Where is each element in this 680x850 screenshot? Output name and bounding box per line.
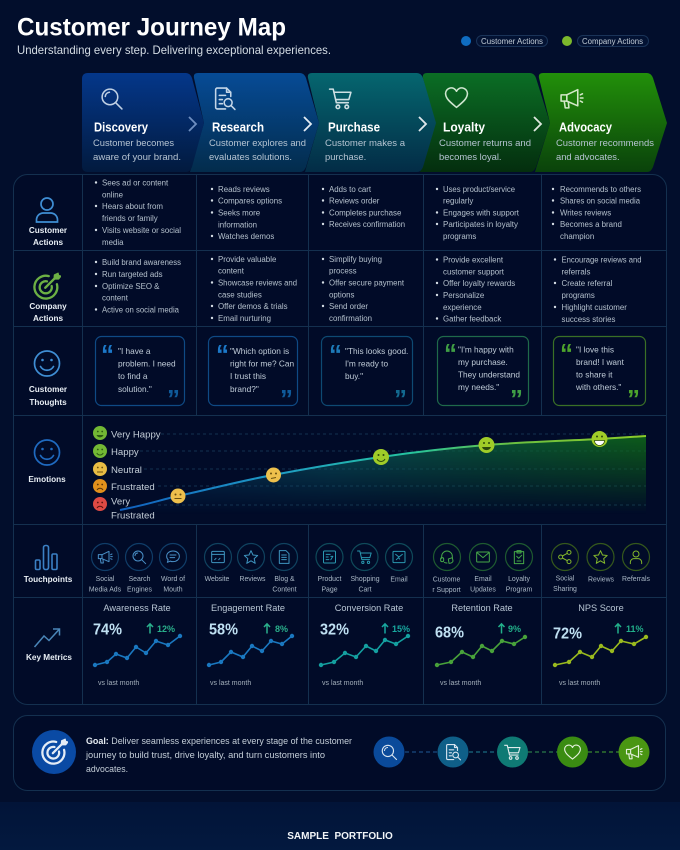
customer actions: loyalty: regularly bbox=[443, 196, 473, 206]
main table bbox=[14, 174, 666, 704]
row: touchpoints bbox=[24, 544, 651, 594]
company actions: advocacy: programs bbox=[562, 291, 595, 300]
marker: loyalty very happy bbox=[478, 437, 494, 453]
row label: customer thoughts bbox=[29, 351, 68, 407]
touchpoints: discovery: Social bbox=[96, 576, 115, 583]
row label: key metrics: Key Metrics bbox=[26, 653, 72, 662]
emotion scale labels bbox=[93, 426, 161, 522]
stage: advocacy: Customer recommends bbox=[556, 137, 654, 148]
journey stages bbox=[82, 73, 667, 172]
quote: advocacy: ” bbox=[627, 384, 640, 414]
touchpoints: discovery: Media Ads bbox=[89, 586, 122, 594]
company actions: loyalty bbox=[436, 256, 515, 324]
emotion scale labels: Frustrated bbox=[111, 510, 155, 522]
quote: research: right for me? Can bbox=[230, 358, 294, 368]
customer actions: purchase: Reviews order bbox=[329, 196, 380, 206]
customer actions: discovery: online bbox=[102, 190, 124, 200]
quote: loyalty: “ bbox=[444, 338, 457, 368]
company actions: research: Provide valuable bbox=[218, 255, 277, 264]
quote: research bbox=[208, 336, 298, 414]
customer actions: discovery: friends or family bbox=[102, 214, 158, 223]
customer actions: advocacy: Recommends to others bbox=[560, 185, 641, 194]
touchpoints: research bbox=[204, 544, 298, 594]
footer label: SAMPLE PORTFOLIO bbox=[287, 831, 393, 842]
stage: loyalty: becomes loyal. bbox=[439, 151, 502, 162]
touchpoints: research: Blog & bbox=[274, 576, 295, 583]
marker: research unsure bbox=[266, 468, 281, 482]
touchpoints: loyalty bbox=[432, 544, 532, 594]
customer actions: purchase: Adds to cart bbox=[329, 185, 372, 194]
quote: advocacy bbox=[554, 336, 646, 414]
quote: advocacy: “ bbox=[560, 338, 573, 368]
quote: loyalty: "I'm happy with bbox=[458, 344, 514, 354]
face: happy bbox=[93, 444, 107, 458]
step: discovery bbox=[374, 736, 404, 768]
legend: customer actions: Customer Actions bbox=[481, 37, 543, 46]
touchpoints: purchase: Product bbox=[318, 576, 341, 583]
emotion scale labels: Very bbox=[111, 496, 130, 508]
quote: purchase bbox=[322, 336, 412, 414]
legend bbox=[461, 36, 648, 46]
arrow bbox=[189, 117, 196, 131]
company actions: advocacy: referrals bbox=[562, 268, 590, 276]
customer actions: advocacy: Shares on social media bbox=[560, 196, 641, 206]
face: very happy bbox=[93, 426, 107, 440]
customer actions: research: Watches demos bbox=[218, 232, 274, 241]
customer actions: advocacy: champion bbox=[560, 232, 594, 241]
emotion scale labels: Very Happy bbox=[111, 430, 161, 440]
row: customer actions bbox=[29, 178, 641, 247]
customer actions: purchase: Receives confirmation bbox=[329, 220, 405, 229]
touchpoints: advocacy: Reviews bbox=[588, 576, 615, 584]
touchpoints: research: Reviews bbox=[239, 576, 266, 583]
row label: customer thoughts: Customer bbox=[29, 385, 68, 394]
company actions: purchase: Send order bbox=[329, 302, 368, 311]
stage: advocacy: and advocates. bbox=[556, 151, 620, 162]
customer actions: research: Compares options bbox=[218, 196, 282, 206]
quote: research: "Which option is bbox=[230, 346, 289, 356]
company actions: loyalty: Gather feedback bbox=[443, 314, 501, 324]
customer actions: research: information bbox=[218, 220, 257, 230]
quote: loyalty: ” bbox=[510, 384, 523, 414]
journey progress bbox=[374, 736, 650, 768]
row label: company actions: Actions bbox=[33, 314, 63, 323]
company actions: loyalty: Provide excellent bbox=[443, 256, 504, 264]
quote: research: brand?" bbox=[230, 384, 259, 394]
quote: advocacy: brand! I want bbox=[576, 357, 625, 367]
company actions: loyalty: experience bbox=[443, 303, 482, 312]
touchpoints: advocacy bbox=[552, 544, 651, 593]
row label: emotions bbox=[28, 440, 66, 484]
quote: purchase: buy." bbox=[345, 371, 363, 381]
emotion scale labels: Neutral bbox=[111, 465, 142, 476]
step: research bbox=[438, 736, 468, 768]
company actions: loyalty: Personalize bbox=[443, 291, 485, 300]
touchpoints: loyalty: r Support bbox=[432, 587, 461, 594]
stage: discovery: Customer becomes bbox=[93, 137, 174, 148]
step: loyalty bbox=[557, 736, 588, 768]
stage: purchase bbox=[305, 73, 436, 172]
touchpoints: loyalty: Loyalty bbox=[508, 576, 530, 583]
goal panel bbox=[14, 716, 666, 790]
metric: engagement rate: Engagement Rate bbox=[211, 603, 285, 613]
title: Customer Journey Map bbox=[17, 14, 286, 42]
company actions: purchase: options bbox=[329, 290, 354, 300]
company actions: research: Email nurturing bbox=[218, 314, 271, 323]
row label: company actions bbox=[29, 273, 67, 323]
goal text: Goal: Deliver seamless experiences at every stage of the customer bbox=[86, 736, 352, 746]
touchpoints: purchase bbox=[316, 544, 412, 594]
metric: awareness rate bbox=[93, 603, 182, 687]
customer actions: loyalty: programs bbox=[443, 232, 476, 241]
metric: awareness rate: Awareness Rate bbox=[103, 603, 171, 613]
touchpoints: advocacy: Social bbox=[556, 576, 575, 582]
stage: loyalty: Customer returns and bbox=[439, 137, 531, 148]
company actions: research: case studies bbox=[218, 290, 262, 300]
arrow bbox=[534, 117, 541, 131]
row label: touchpoints bbox=[24, 546, 73, 584]
touchpoints: discovery bbox=[89, 544, 186, 594]
metric: conversion rate: vs last month bbox=[322, 680, 363, 687]
emotion curve bbox=[120, 436, 646, 510]
company actions: research: Offer demos & trials bbox=[218, 302, 288, 311]
customer actions: advocacy: Writes reviews bbox=[560, 208, 611, 218]
customer actions: advocacy bbox=[552, 185, 641, 241]
stage: loyalty: Loyalty bbox=[443, 120, 485, 134]
metric: nps score: vs last month bbox=[559, 680, 600, 687]
row: customer thoughts bbox=[29, 336, 646, 414]
customer actions: research bbox=[211, 185, 282, 241]
company actions: advocacy: Create referral bbox=[562, 279, 613, 288]
row: company actions bbox=[29, 255, 642, 324]
face: very frustrated bbox=[93, 497, 107, 511]
customer actions: loyalty: Engages with support bbox=[443, 208, 520, 218]
customer actions: discovery: media bbox=[102, 238, 124, 247]
quote: loyalty: They understand bbox=[458, 370, 520, 380]
row label: key metrics bbox=[26, 629, 72, 662]
company actions: research: Showcase reviews and bbox=[218, 278, 297, 288]
quote: discovery: "I have a bbox=[118, 346, 151, 356]
metric: nps score: 72% bbox=[553, 626, 582, 642]
touchpoints: loyalty: Program bbox=[506, 586, 532, 594]
company actions: loyalty: Offer loyalty rewards bbox=[443, 279, 515, 288]
customer actions: discovery bbox=[95, 178, 181, 247]
company actions: advocacy: success stories bbox=[562, 315, 615, 324]
quote: purchase: I'm ready to bbox=[345, 358, 388, 368]
emotion area bbox=[164, 437, 646, 506]
marker: advocacy delighted bbox=[592, 431, 608, 447]
customer actions: loyalty bbox=[436, 185, 520, 241]
touchpoints: research: Content bbox=[272, 586, 297, 594]
metric: retention rate: Retention Rate bbox=[451, 603, 513, 613]
arrow bbox=[304, 117, 311, 131]
emotion chart bbox=[93, 426, 646, 522]
company actions: purchase: Simplify buying bbox=[329, 255, 382, 264]
touchpoints: loyalty: Email bbox=[474, 576, 492, 583]
face: frustrated bbox=[93, 479, 107, 493]
metric: conversion rate: 15% bbox=[392, 624, 410, 634]
company actions: discovery: Run targeted ads bbox=[102, 270, 163, 279]
stage: research bbox=[190, 73, 319, 172]
company actions: purchase: Offer secure payment bbox=[329, 278, 405, 288]
customer actions: advocacy: Becomes a brand bbox=[560, 220, 622, 229]
company actions: purchase: confirmation bbox=[329, 314, 372, 323]
metric: awareness rate: 74% bbox=[93, 622, 122, 638]
stage: loyalty bbox=[420, 73, 550, 172]
row label: customer actions: Customer bbox=[29, 226, 68, 235]
quote: discovery: to find a bbox=[118, 371, 148, 381]
company actions: loyalty: customer support bbox=[443, 268, 505, 276]
touchpoints: advocacy: Referrals bbox=[622, 576, 651, 583]
stage: research: evaluates solutions. bbox=[209, 151, 292, 162]
legend: company actions: Company Actions bbox=[582, 37, 643, 46]
row label: touchpoints: Touchpoints bbox=[24, 575, 73, 584]
quote: advocacy: to share it bbox=[576, 370, 613, 380]
quote: discovery: ” bbox=[167, 384, 180, 414]
metric: awareness rate: vs last month bbox=[98, 680, 139, 687]
quote: purchase: ” bbox=[394, 384, 407, 414]
quote: loyalty: my purchase. bbox=[458, 357, 508, 367]
row: emotions bbox=[28, 426, 646, 522]
quote: discovery: problem. I need bbox=[118, 358, 176, 368]
stage: discovery: Discovery bbox=[94, 120, 148, 134]
stage: advocacy bbox=[535, 73, 667, 172]
metric: retention rate: 68% bbox=[435, 624, 464, 642]
metric: conversion rate: Conversion Rate bbox=[335, 603, 403, 613]
row: key metrics bbox=[26, 603, 648, 687]
touchpoints: loyalty: Updates bbox=[470, 586, 496, 594]
quote: advocacy: with others." bbox=[575, 382, 621, 392]
metric: engagement rate: 8% bbox=[275, 624, 288, 634]
row label: customer actions: Actions bbox=[33, 238, 63, 247]
goal text line 3: advocates. bbox=[86, 764, 128, 774]
quote: purchase: “ bbox=[329, 339, 342, 369]
touchpoints: purchase: Cart bbox=[358, 586, 372, 594]
stage: discovery: aware of your brand. bbox=[93, 151, 181, 162]
touchpoints: loyalty: Custome bbox=[433, 576, 460, 584]
metric: engagement rate bbox=[207, 603, 294, 687]
company actions: discovery: content bbox=[102, 294, 129, 302]
quote: discovery bbox=[96, 336, 184, 414]
legend: company actions bbox=[562, 36, 648, 46]
touchpoints: discovery: Search bbox=[129, 576, 151, 583]
metric: retention rate: vs last month bbox=[440, 680, 481, 687]
company actions: discovery: Optimize SEO & bbox=[102, 282, 160, 291]
face: neutral bbox=[93, 462, 107, 476]
customer actions: discovery: Hears about from bbox=[102, 202, 163, 211]
customer actions: research: Reads reviews bbox=[218, 185, 270, 194]
company actions: discovery: Active on social media bbox=[102, 306, 180, 314]
quote: discovery: solution." bbox=[118, 384, 152, 394]
stage: research: Customer explores and bbox=[209, 137, 306, 148]
stage: purchase: Purchase bbox=[328, 120, 380, 134]
customer actions: discovery: Sees ad or content bbox=[102, 178, 169, 188]
footer band bbox=[0, 802, 680, 850]
touchpoints: purchase: Page bbox=[321, 586, 338, 594]
stage: research: Research bbox=[212, 120, 264, 134]
company actions: advocacy: Encourage reviews and bbox=[562, 256, 642, 264]
goal icon bbox=[32, 730, 76, 774]
metric: conversion rate bbox=[319, 603, 410, 687]
stage: advocacy: Advocacy bbox=[559, 120, 612, 134]
company actions: discovery bbox=[95, 258, 181, 314]
metric: nps score: NPS Score bbox=[578, 603, 624, 613]
metric: awareness rate: 12% bbox=[157, 624, 175, 634]
quote: purchase: "This looks good. bbox=[345, 346, 408, 356]
stage: discovery bbox=[82, 73, 204, 172]
quote: research: “ bbox=[216, 339, 229, 369]
quote: research: ” bbox=[280, 384, 293, 414]
metric: nps score: 11% bbox=[626, 624, 644, 634]
emotion grid lines bbox=[140, 434, 646, 505]
step: purchase bbox=[497, 736, 528, 768]
touchpoints: discovery: Mouth bbox=[163, 586, 183, 594]
customer actions: purchase bbox=[322, 185, 405, 229]
row label: customer thoughts: Thoughts bbox=[29, 398, 67, 407]
touchpoints: purchase: Shopping bbox=[350, 576, 380, 583]
metric: nps score bbox=[553, 603, 648, 687]
quote: discovery: “ bbox=[101, 339, 114, 369]
quote: loyalty bbox=[438, 336, 528, 414]
touchpoints: discovery: Word of bbox=[161, 576, 185, 583]
company actions: advocacy bbox=[554, 256, 642, 324]
goal text line 2: journey to build trust, drive loyalty, and turn customers into bbox=[85, 750, 325, 760]
quote: advocacy: "I love this bbox=[576, 344, 614, 354]
customer actions: discovery: Visits website or social bbox=[102, 226, 181, 235]
company actions: purchase bbox=[322, 255, 405, 323]
customer actions: purchase: Completes purchase bbox=[329, 208, 402, 218]
company actions: purchase: process bbox=[329, 266, 357, 276]
company actions: research: content bbox=[218, 266, 245, 276]
touchpoints: advocacy: Sharing bbox=[553, 586, 577, 593]
customer actions: loyalty: Uses product/service bbox=[443, 185, 516, 194]
row label: company actions: Company bbox=[29, 302, 67, 311]
subtitle: Understanding every step. Delivering exceptional experiences. bbox=[17, 43, 331, 57]
arrow bbox=[419, 117, 426, 131]
company actions: research bbox=[211, 255, 297, 323]
metric: conversion rate: 32% bbox=[320, 622, 349, 638]
marker: purchase happy bbox=[373, 449, 389, 465]
company actions: advocacy: Highlight customer bbox=[562, 303, 627, 312]
touchpoints: research: Website bbox=[205, 576, 230, 583]
customer actions: research: Seeks more bbox=[218, 208, 261, 218]
quote: research: I trust this bbox=[230, 371, 266, 381]
metric: retention rate: 9% bbox=[508, 624, 521, 634]
quote: loyalty: my needs." bbox=[458, 382, 499, 392]
row label: emotions: Emotions bbox=[28, 475, 66, 484]
touchpoints: discovery: Engines bbox=[127, 586, 153, 594]
touchpoints: purchase: Email bbox=[390, 576, 408, 584]
customer actions: loyalty: Participates in loyalty bbox=[443, 220, 518, 229]
emotion scale labels: Happy bbox=[111, 447, 139, 458]
stage: purchase: purchase. bbox=[325, 151, 366, 162]
metric: engagement rate: 58% bbox=[209, 622, 238, 638]
metric: retention rate bbox=[435, 603, 527, 687]
metric: engagement rate: vs last month bbox=[210, 680, 251, 687]
row label: customer actions bbox=[29, 198, 68, 247]
legend: customer actions bbox=[461, 36, 548, 46]
company actions: discovery: Build brand awareness bbox=[102, 258, 181, 267]
emotion scale labels: Frustrated bbox=[111, 482, 155, 493]
marker: discovery neutral bbox=[170, 488, 186, 504]
step: advocacy bbox=[618, 736, 650, 768]
stage: purchase: Customer makes a bbox=[325, 137, 406, 148]
